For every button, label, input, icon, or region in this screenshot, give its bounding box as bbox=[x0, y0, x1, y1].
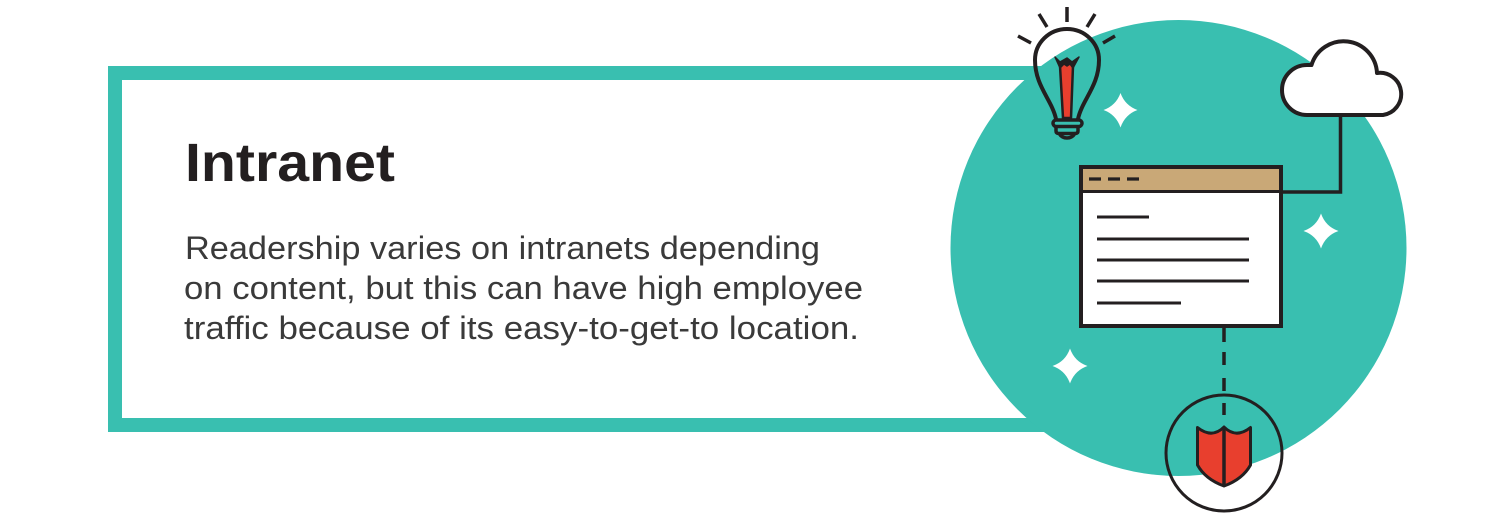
body text: on content, but this can have high employee bbox=[184, 270, 863, 306]
connector: dashed line to shield bbox=[1222, 328, 1226, 415]
heading: Intranet bbox=[185, 133, 395, 193]
background circle bbox=[950, 20, 1406, 476]
connector: window to cloud bbox=[1283, 115, 1340, 192]
body text: Readership varies on intranets depending bbox=[185, 230, 820, 266]
icon: sparkles bbox=[1052, 93, 1338, 384]
icon: light bulb bbox=[1018, 7, 1115, 138]
body text: traffic because of its easy-to-get-to location. bbox=[184, 310, 859, 346]
panel: text frame bbox=[115, 73, 1115, 425]
icon: shield in circle bbox=[1166, 395, 1282, 511]
body text bbox=[184, 230, 863, 346]
icon: browser window bbox=[1081, 167, 1281, 326]
icon: cloud bbox=[1282, 41, 1401, 115]
